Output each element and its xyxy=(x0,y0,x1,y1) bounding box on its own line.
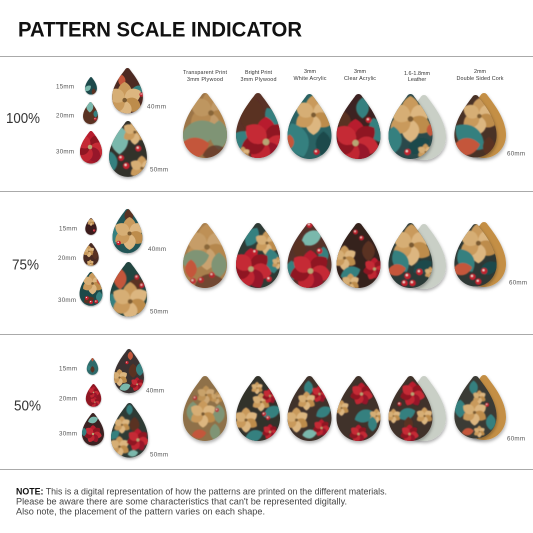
drop: transparent print plywood 75% xyxy=(182,223,230,292)
material column headings: Clear Acrylic xyxy=(344,76,376,82)
drop: bright print plywood 50% xyxy=(233,376,283,445)
drop: 50mm at 50% xyxy=(107,403,150,458)
drop: white acrylic 50% xyxy=(283,376,333,441)
size labels 75% xyxy=(58,226,527,316)
title: PATTERN SCALE INDICATOR xyxy=(18,18,302,42)
leather back xyxy=(402,95,446,160)
drop: 50mm at 100% xyxy=(108,121,149,180)
drop: white acrylic 100% xyxy=(281,94,335,160)
leather front xyxy=(386,223,437,288)
material column headings: White Acrylic xyxy=(294,76,327,82)
cork front xyxy=(451,223,501,286)
size labels 50% xyxy=(59,366,525,458)
leather front xyxy=(386,376,434,444)
drop: 40mm at 50% xyxy=(110,349,145,393)
drop: 40mm at 100% xyxy=(111,68,144,116)
size labels 75%: 40mm xyxy=(148,246,166,253)
size labels 50%: 40mm xyxy=(146,388,164,394)
size labels 100%: 15mm xyxy=(56,84,74,90)
drop: 15mm at 100% xyxy=(83,77,97,95)
drop: leather with grey back 100% xyxy=(385,94,446,160)
drop: clear acrylic 50% xyxy=(333,376,384,444)
size labels 75%: 15mm xyxy=(59,226,77,232)
label: 75%: 75% xyxy=(12,258,39,274)
cork back xyxy=(462,222,506,287)
drop: cork double sided 75% xyxy=(451,222,506,287)
drop: bright print plywood 75% xyxy=(234,223,282,292)
size labels 100% xyxy=(56,84,525,174)
material column headings: 3mm Plywood xyxy=(187,77,223,83)
cork back xyxy=(462,375,506,440)
leather front xyxy=(385,94,435,160)
material column headings: Leather xyxy=(408,77,426,83)
material column headings: Double Sided Cork xyxy=(456,76,504,82)
panel: 75% scale xyxy=(12,209,527,321)
drop: 50mm at 75% xyxy=(109,262,149,320)
size labels 100%: 60mm xyxy=(507,150,525,158)
note text: NOTE: This is a digital representation of how the patterns are printed on the different materials. xyxy=(16,486,387,496)
material column headings: 2mm xyxy=(474,69,486,75)
drop: white acrylic 75% xyxy=(285,222,333,293)
material column headings xyxy=(183,69,504,83)
drop: 15mm at 50% xyxy=(87,358,98,375)
drop: clear acrylic 75% xyxy=(335,223,383,292)
size labels 50%: 30mm xyxy=(59,430,77,438)
note text: Please be aware there are some characteristics that can't be represented digitally. xyxy=(16,496,347,506)
drop: leather with grey back 50% xyxy=(386,376,446,444)
leather back xyxy=(402,376,446,441)
drop: leather with grey back 75% xyxy=(386,223,446,289)
size labels 100%: 20mm xyxy=(56,112,74,120)
note text xyxy=(16,486,387,516)
size labels 100%: 50mm xyxy=(150,166,168,174)
leather back xyxy=(402,224,446,289)
drop: clear acrylic 100% xyxy=(335,94,383,163)
drop: transparent print plywood 50% xyxy=(183,376,227,441)
drop: 30mm at 50% xyxy=(81,413,104,446)
panel: 100% scale xyxy=(6,68,525,181)
material column headings: 1.6-1.8mm xyxy=(404,71,430,77)
material column headings: Bright Print xyxy=(245,70,272,76)
panel: 50% scale xyxy=(14,349,525,458)
size labels 100%: 40mm xyxy=(147,104,166,110)
size labels 50%: 15mm xyxy=(59,366,77,372)
drop: cork double sided 50% xyxy=(454,375,506,440)
note text: Also note, the placement of the pattern varies on each shape. xyxy=(16,506,265,516)
drop: 20mm at 75% xyxy=(83,243,99,267)
cork back xyxy=(462,93,506,158)
drop: 20mm at 50% xyxy=(86,384,101,408)
drop: 30mm at 75% xyxy=(80,272,104,306)
size labels 50%: 20mm xyxy=(59,396,77,402)
size labels 75%: 20mm xyxy=(58,255,76,262)
material column headings: 3mm xyxy=(354,69,366,75)
cork front xyxy=(454,376,497,438)
label: 50%: 50% xyxy=(14,398,41,414)
drop: bright print plywood 100% xyxy=(234,93,282,162)
size labels 75%: 50mm xyxy=(150,308,168,316)
drop: 30mm at 100% xyxy=(80,131,103,166)
drop: 40mm at 75% xyxy=(110,209,147,253)
drop: 15mm at 75% xyxy=(85,218,97,235)
size labels 50%: 50mm xyxy=(150,452,168,458)
size labels 75%: 60mm xyxy=(509,280,527,286)
material column headings: 3mm Plywood xyxy=(240,77,276,83)
material column headings: 3mm xyxy=(304,69,316,75)
drop: 20mm at 100% xyxy=(83,101,98,124)
drop: cork double sided 100% xyxy=(449,93,506,158)
size labels 50%: 60mm xyxy=(507,436,525,442)
drop: transparent print plywood 100% xyxy=(182,93,230,162)
size labels 100%: 30mm xyxy=(56,148,74,156)
label: 100%: 100% xyxy=(6,111,40,127)
size labels 75%: 30mm xyxy=(58,297,76,304)
material column headings: Transparent Print xyxy=(183,70,228,76)
cork front xyxy=(449,95,498,158)
